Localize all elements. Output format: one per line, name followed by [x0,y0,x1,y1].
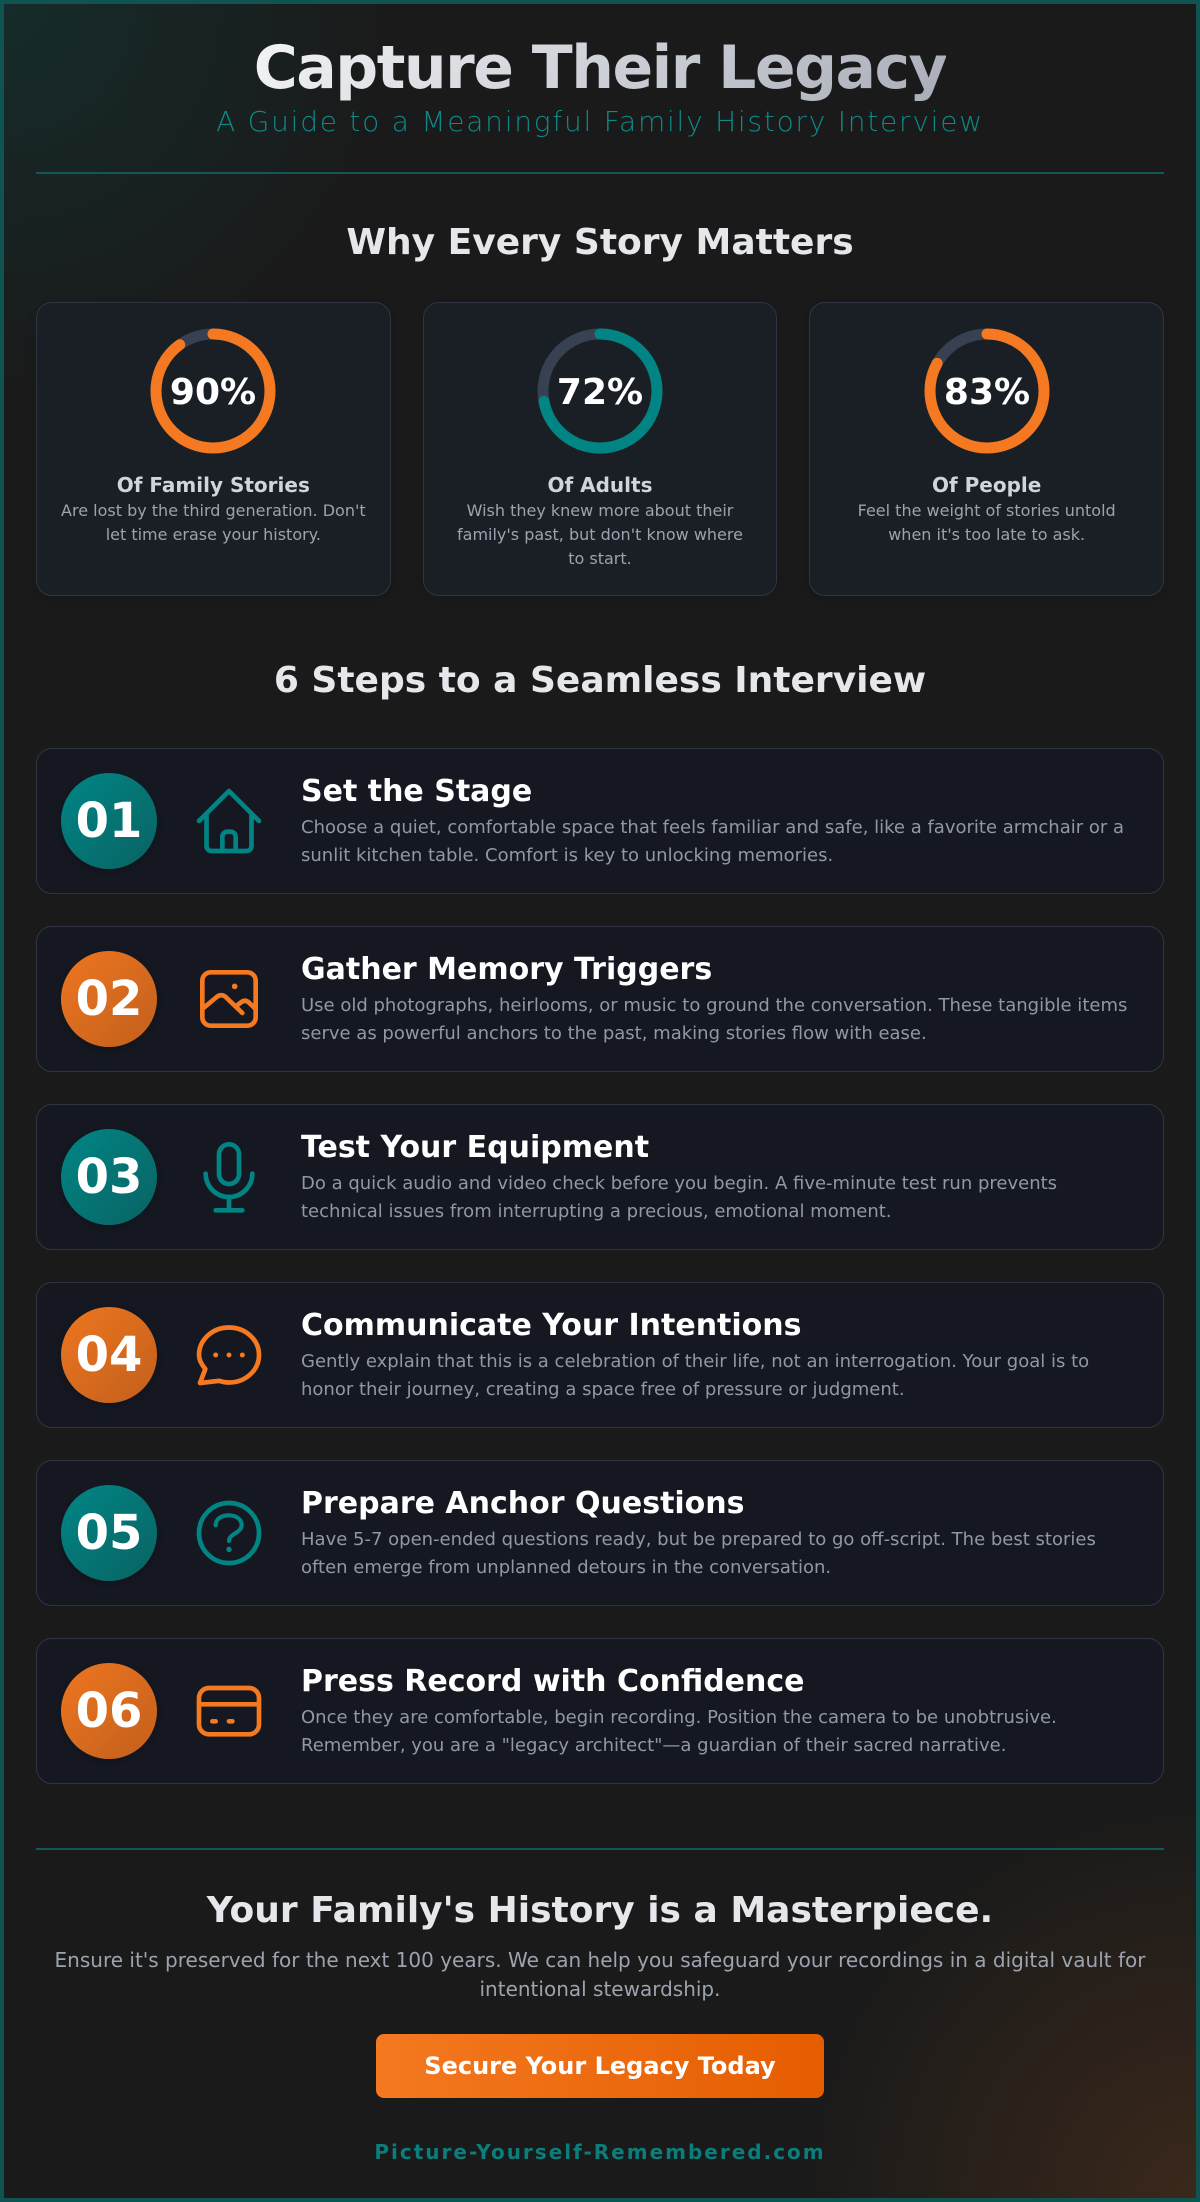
step description: honor their journey, creating a space free of pressure or judgment. [301,1379,905,1400]
step number 04: 04 [76,1327,142,1383]
step description [301,817,1124,866]
step number 04 [61,1307,157,1403]
heading: why every story matters: Why Every Story Matters [346,222,854,263]
panel: step 5 [36,1460,1164,1606]
step number 02 [61,951,157,1047]
step description: Remember, you are a "legacy architect"—a guardian of their sacred narrative. [301,1735,1006,1756]
panel: stat 83% [809,302,1164,596]
title: Capture Their Legacy [254,33,946,103]
step description: Once they are comfortable, begin recording. Position the camera to be unobtrusive. [301,1707,1057,1728]
panel: stat 72% [423,302,777,596]
ring chart 83% [924,328,1050,454]
icon: microphone [203,1142,255,1213]
step description: serve as powerful anchors to the past, making stories flow with ease. [301,1023,927,1044]
stat description [457,501,743,568]
step description: sunlit kitchen table. Comfort is key to unlocking memories. [301,845,833,866]
closing paragraph: intentional stewardship. [480,1977,720,2001]
step title: Gather Memory Triggers [301,952,712,987]
step number 05 [61,1485,157,1581]
step title: Prepare Anchor Questions [301,1486,745,1521]
stat description: Feel the weight of stories untold [858,501,1116,520]
stat description: family's past, but don't know where [457,525,743,544]
step description [301,1351,1089,1400]
step description [301,995,1127,1044]
panel: step 3 [36,1104,1164,1250]
step description: Gently explain that this is a celebration of their life, not an interrogation. Your goal is to [301,1351,1089,1372]
step description: often emerge from unplanned detours in the conversation. [301,1557,831,1578]
step description [301,1529,1096,1578]
stat description: Are lost by the third generation. Don't [61,501,366,520]
ring chart 72%: 72% [557,372,643,413]
stat description: let time erase your history. [106,525,321,544]
subtitle: A Guide to a Meaningful Family History Interview [216,105,984,138]
call to action button: Secure Your Legacy Today [424,2052,776,2080]
step description: Use old photographs, heirlooms, or music to ground the conversation. These tangible items [301,995,1127,1016]
panel: step 2 [36,926,1164,1072]
step number 02: 02 [76,971,142,1027]
icon: photo [200,970,258,1028]
stat label: Of Adults [547,473,652,497]
step title: Communicate Your Intentions [301,1308,802,1343]
ring chart 83%: 83% [944,372,1030,413]
step title: Set the Stage [301,774,532,809]
step number 01: 01 [76,793,142,849]
step description [301,1707,1057,1756]
ring chart 72% [538,328,662,454]
stat description: Wish they knew more about their [467,501,733,520]
panel: step 6 [36,1638,1164,1784]
panel: step 1 [36,748,1164,894]
step description [301,1173,1057,1222]
closing paragraph: Ensure it's preserved for the next 100 years. We can help you safeguard your recordings in a digital vault for [55,1948,1145,1972]
icon: card [196,1686,262,1737]
call to action button [376,2034,824,2098]
step number 05: 05 [76,1505,142,1561]
icon: question mark [196,1500,262,1566]
panel: stat 90% [36,302,391,596]
step number 06: 06 [76,1683,142,1739]
step title: Test Your Equipment [301,1130,649,1165]
stat description [858,501,1116,544]
icon: speech bubble [196,1325,262,1386]
closing heading: Your Family's History is a Masterpiece. [207,1890,993,1931]
stat label: Of People [932,473,1041,497]
heading: six steps: 6 Steps to a Seamless Interview [274,660,926,701]
stat label: Of Family Stories [117,473,310,497]
panel: step 4 [36,1282,1164,1428]
step description: Do a quick audio and video check before you begin. A five-minute test run prevents [301,1173,1057,1194]
ring chart 90% [150,328,276,454]
step description: technical issues from interrupting a precious, emotional moment. [301,1201,892,1222]
stat description: when it's too late to ask. [888,525,1085,544]
icon: house [196,788,262,854]
footer website: Picture-Yourself-Remembered.com [374,2140,826,2164]
step description: Choose a quiet, comfortable space that feels familiar and safe, like a favorite armchair or a [301,817,1124,838]
closing paragraph [55,1948,1146,2001]
ring chart 90%: 90% [170,372,256,413]
step number 03 [61,1129,157,1225]
step title: Press Record with Confidence [301,1664,805,1699]
step number 03: 03 [76,1149,142,1205]
stat description: to start. [568,549,632,568]
step number 01 [61,773,157,869]
step number 06 [61,1663,157,1759]
stat description [61,501,366,544]
step description: Have 5-7 open-ended questions ready, but be prepared to go off-script. The best stories [301,1529,1096,1550]
